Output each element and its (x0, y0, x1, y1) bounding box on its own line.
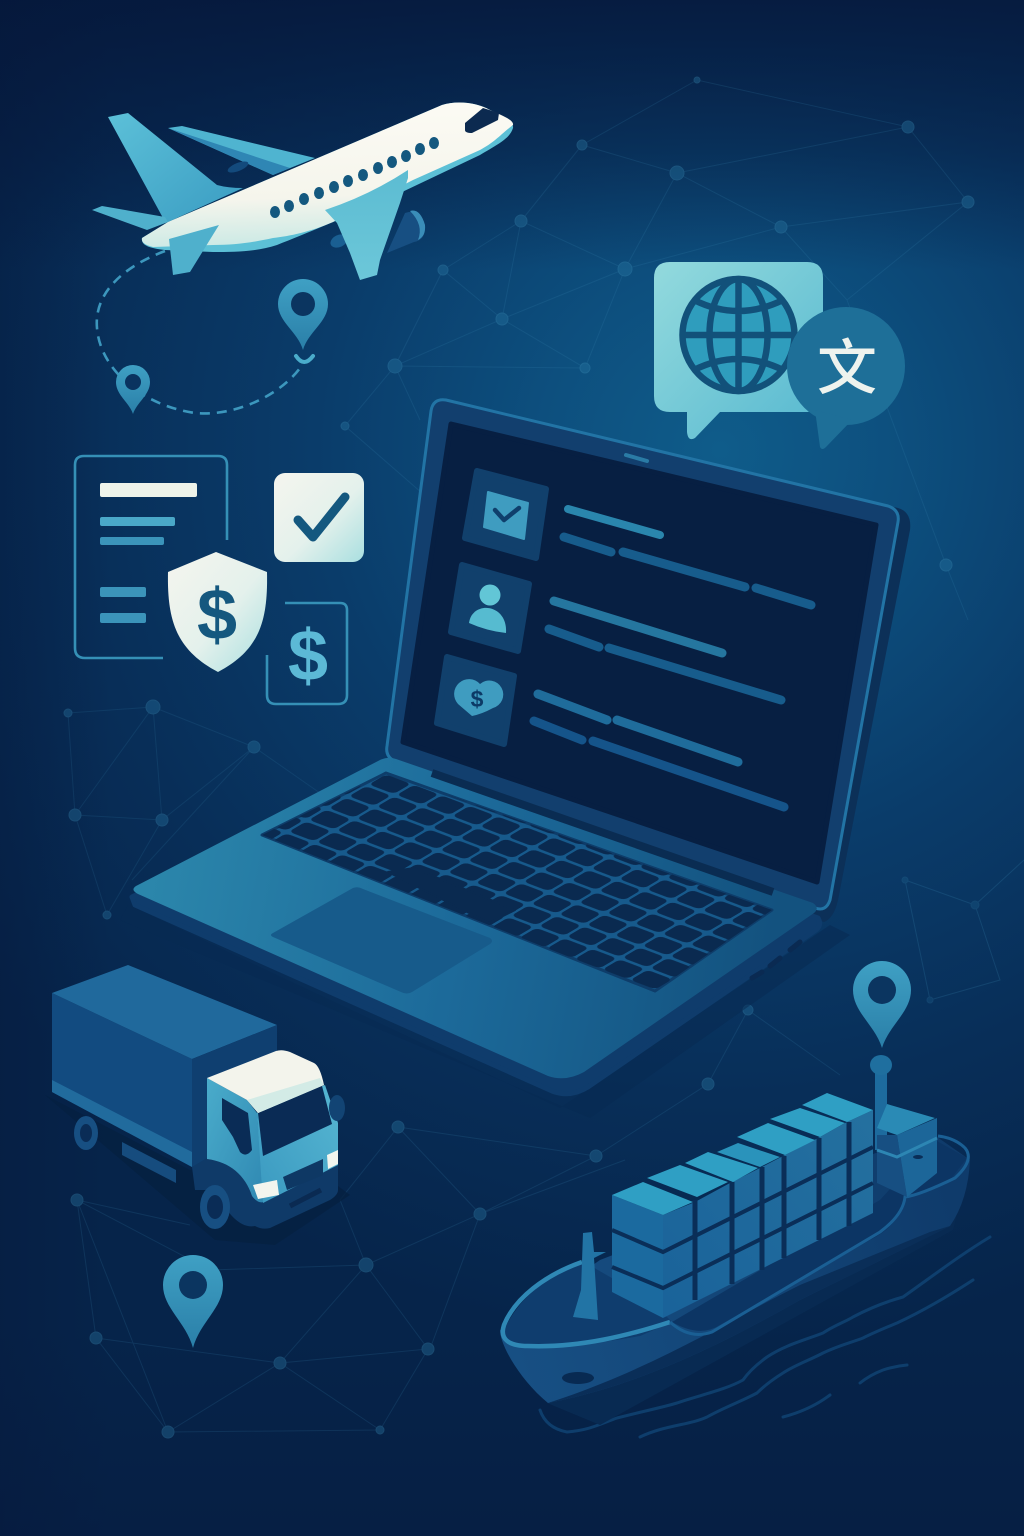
laptop lid back edge (400, 402, 910, 922)
speech bubble with translation glyph (787, 307, 905, 449)
icon: location pin near plane (278, 279, 328, 350)
laptop (120, 400, 910, 1118)
camera notch (626, 455, 647, 461)
hull rim bow (503, 1262, 670, 1346)
cab front (257, 1085, 338, 1203)
headlight left (253, 1180, 279, 1199)
hull rim side (670, 1136, 968, 1334)
truck shadow (45, 1095, 350, 1245)
keyboard keys (262, 773, 772, 991)
translation icon (654, 262, 905, 449)
side mirror (329, 1095, 345, 1121)
plane cockpit window (465, 108, 499, 133)
icon: small location pin (116, 365, 150, 414)
roof visor (247, 1078, 324, 1113)
screen row: person (451, 565, 781, 700)
bridge superstructure (877, 1104, 937, 1197)
trackpad (271, 887, 492, 994)
laptop lid (387, 400, 898, 909)
front bumper slot (290, 1190, 321, 1206)
plane windows (270, 137, 439, 218)
laptop hinge (432, 773, 773, 892)
plane lower fuselage (142, 103, 513, 252)
cab roof (207, 1050, 324, 1113)
globe (680, 277, 796, 393)
cargo box lower strip (52, 1080, 192, 1167)
container ship (500, 1055, 990, 1437)
network mesh: bottom (71, 1005, 840, 1438)
plane rear stabilizer (92, 206, 168, 230)
container long side (663, 1110, 873, 1318)
speech bubble with translation glyph: 文 (817, 335, 877, 402)
headlight right (327, 1150, 338, 1169)
cab lower dark (192, 1158, 338, 1229)
speech bubble with globe (654, 262, 823, 439)
icon: route marker tick (296, 356, 313, 362)
document and payment icons (75, 456, 364, 704)
shield with dollar sign (168, 552, 267, 672)
cab side window (222, 1098, 252, 1155)
hull (500, 1132, 970, 1403)
plane far wing (168, 126, 315, 175)
document text lines (100, 483, 197, 623)
screen row: heart with dollar: $ (471, 686, 484, 712)
cab side (207, 1078, 264, 1202)
deck (504, 1262, 672, 1346)
cargo box top (52, 965, 277, 1059)
screen row: checkbox (465, 471, 811, 605)
rear wheel (74, 1116, 98, 1150)
keyboard well (262, 773, 772, 991)
laptop base edge (132, 770, 820, 1094)
network mesh: right (902, 860, 1024, 1003)
laptop screen (403, 424, 876, 882)
checkbox (274, 473, 364, 562)
plane engine (328, 211, 425, 253)
laptop base shadow (120, 905, 850, 1118)
dollar frame: $ (288, 616, 328, 696)
water ripples (540, 1237, 990, 1437)
hull waterline shadow (547, 1165, 970, 1425)
container tops (612, 1093, 873, 1215)
side step (122, 1142, 176, 1183)
rear deck (672, 1140, 967, 1331)
container end face (612, 1195, 663, 1318)
location pin bottom left (163, 1255, 223, 1348)
truck (45, 965, 350, 1245)
plane fuselage (142, 103, 513, 247)
network mesh: upper right (341, 77, 974, 620)
laptop side ports (752, 942, 800, 978)
network mesh: left (64, 700, 330, 919)
plane near wing (325, 170, 408, 280)
hull lower band (548, 1226, 950, 1403)
airplane (92, 103, 513, 280)
dashed flight route (97, 251, 300, 413)
plane tail fin (108, 113, 243, 222)
plane front stabilizer (169, 225, 219, 275)
laptop base deck (133, 758, 817, 1078)
windshield (258, 1086, 332, 1156)
document frame (75, 456, 227, 658)
cargo box end (192, 1025, 277, 1175)
front wheel (200, 1185, 230, 1229)
location pin above ship (853, 961, 911, 1048)
dollar frame (267, 603, 347, 704)
screen row: heart with dollar (437, 657, 784, 807)
grille (283, 1159, 323, 1190)
hawsepipe (562, 1372, 594, 1384)
bow mast (573, 1232, 606, 1320)
cargo box side (52, 993, 192, 1167)
funnel mast (870, 1055, 892, 1150)
shield with dollar sign: $ (197, 575, 237, 655)
container grid gaps (612, 1122, 873, 1300)
